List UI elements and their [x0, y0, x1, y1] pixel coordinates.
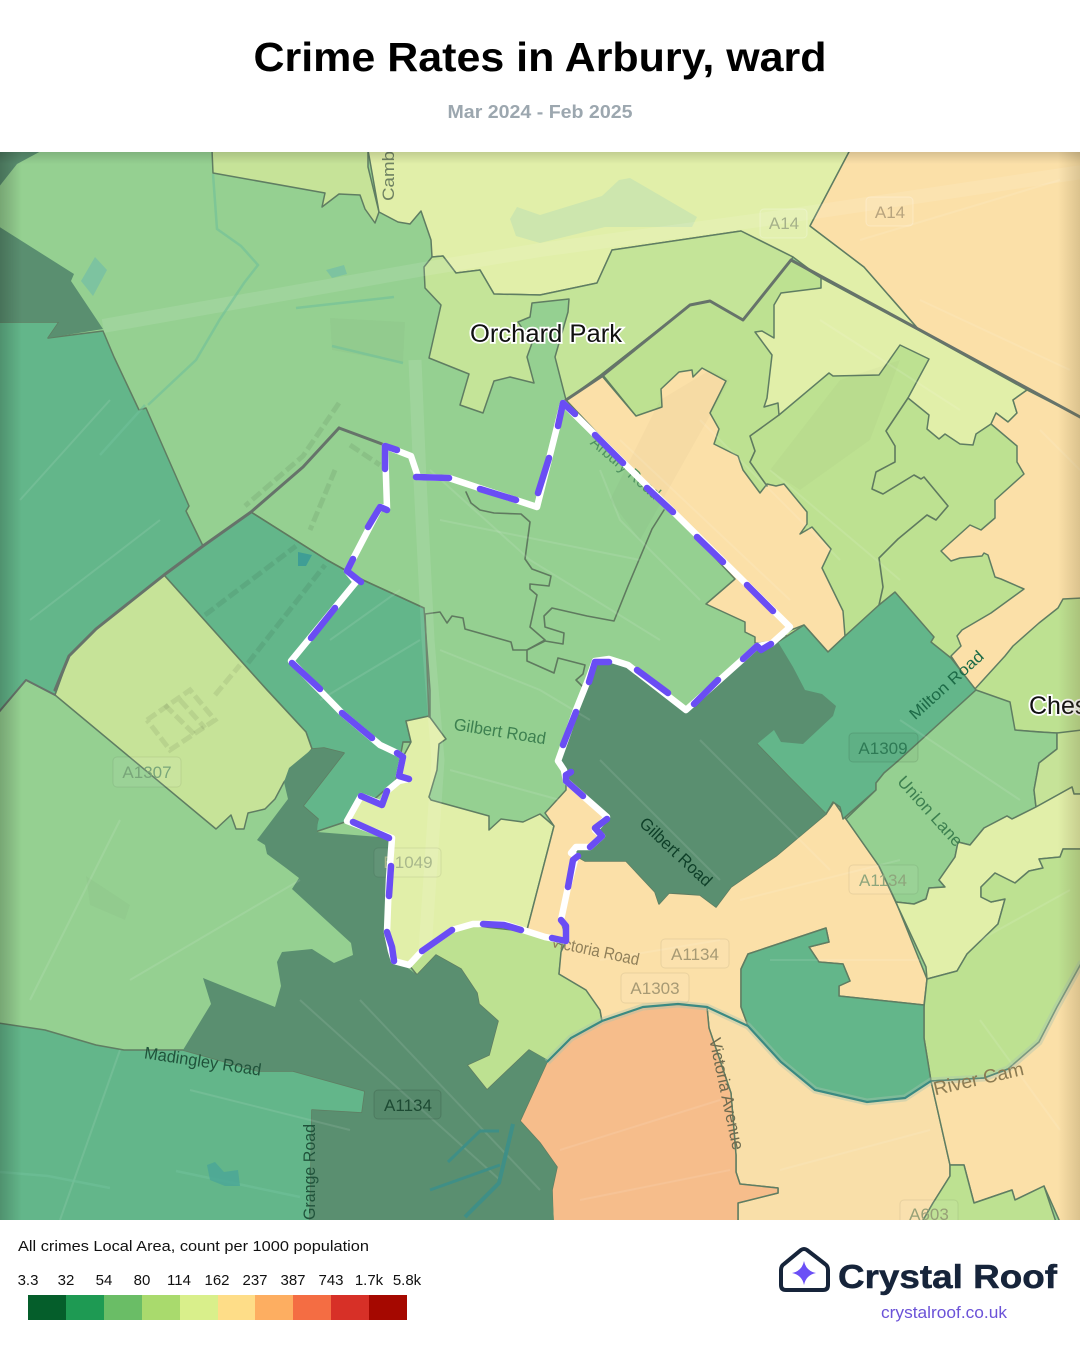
shield: A14 west: A14 [769, 214, 799, 233]
shield: B1049: B1049 [383, 853, 433, 872]
region: lime south of ward [409, 924, 602, 1090]
label: Milton Road: Milton Road [906, 648, 988, 723]
region: cream strip in ward [527, 781, 607, 941]
legend tick labels: 1.7k [355, 1272, 384, 1289]
shield: A14 east [866, 197, 913, 226]
label: Grange Road: Grange Road [300, 1124, 319, 1220]
region: west dark green [0, 226, 103, 338]
region: Orchard Park [424, 231, 793, 413]
label: River Cam: River Cam [932, 1059, 1026, 1100]
purple dashes on boundary [292, 403, 773, 961]
region: yellow east [896, 787, 1080, 979]
brand logo [781, 1249, 1058, 1322]
Arbury ward boundary [291, 403, 790, 965]
legend tick labels: 32 [58, 1272, 74, 1289]
legend tick labels: 5.8k [393, 1272, 422, 1289]
shield: A1134 city: A1134 [384, 1096, 432, 1115]
pond [510, 178, 697, 243]
legend colour scale [28, 1295, 407, 1320]
map edge vignette [0, 152, 1080, 1220]
region: east lime [602, 260, 1080, 735]
legend tick labels: 743 [318, 1272, 344, 1289]
region: cream south-east [931, 962, 1080, 1222]
ladder paths [147, 403, 380, 750]
label: Victoria Avenue: Victoria Avenue [705, 1036, 748, 1152]
shield: A1303 [621, 973, 689, 1003]
boundaries: east estates [872, 398, 948, 605]
place label: Orchard Park: Orchard Park [470, 320, 622, 348]
label: Gilbert Road dark: Gilbert Road [636, 814, 716, 890]
region: cream east of ward [566, 368, 845, 652]
region: green right of dark centre [740, 592, 976, 819]
shield: A1134 east: A1134 [859, 871, 907, 890]
region: cream below Gilbert Road [559, 802, 927, 1026]
region: pale lime Newnham fields [55, 575, 312, 829]
region: north-east yellow estate [755, 278, 1027, 445]
region: Union Lane green [846, 690, 1057, 904]
shield: A1309: A1309 [858, 739, 908, 758]
shield: A1134 south [661, 939, 729, 968]
label: Arbury Road: Arbury Road [587, 432, 664, 503]
shield: A14 west [760, 209, 807, 238]
road shield labels [113, 197, 958, 1230]
shield: B1049 [374, 848, 441, 877]
region: lime bottom [922, 1165, 1056, 1222]
legend [18, 1238, 422, 1320]
region: green west of ward [164, 512, 430, 832]
region: Arbury south yellow [347, 716, 554, 965]
shield: A1307: A1307 [122, 763, 172, 782]
shield: A603: A603 [909, 1205, 949, 1224]
website url: crystalroof.co.uk [881, 1304, 1008, 1322]
shield: A1134 south: A1134 [671, 945, 719, 964]
region: top lime fields [212, 150, 379, 223]
region: city centre dark [183, 748, 557, 1222]
legend tick labels: 387 [280, 1272, 306, 1289]
region: north-east cream [810, 150, 1080, 418]
thick ward boundary lines [0, 260, 1080, 713]
shield: A1309 [849, 733, 918, 762]
shield: A603 [900, 1200, 958, 1230]
region: top yellow north of Orchard Park [368, 150, 920, 331]
icon: house with star [781, 1249, 828, 1290]
region: top-left corner dark [0, 152, 39, 186]
shield: A1134 city [374, 1090, 441, 1119]
legend tick labels: 3.3 [18, 1272, 38, 1289]
legend tick labels: 80 [134, 1272, 150, 1289]
choropleth map [0, 150, 1080, 1230]
legend tick labels: 114 [167, 1272, 191, 1289]
shield: A14 east: A14 [875, 203, 905, 222]
label: Union Lane: Union Lane [894, 772, 967, 850]
title: Crime Rates in Arbury, ward [254, 34, 826, 80]
legend tick labels: 162 [204, 1272, 230, 1289]
region: west green [0, 322, 203, 713]
shield: A1134 east [849, 865, 918, 894]
legend title: All crimes Local Area, count per 1000 population [18, 1238, 369, 1255]
subtitle: date range: Mar 2024 - Feb 2025 [448, 102, 632, 122]
label: Gilbert Road in ward: Gilbert Road [452, 715, 547, 748]
region: dark centre East Chesterton [558, 642, 836, 907]
label: Victoria Road: Victoria Road [549, 932, 641, 969]
label: Cambridge road cut off: Camb [379, 151, 398, 201]
legend tick labels [18, 1272, 422, 1289]
neighbourhood boundaries inside the ward [251, 492, 664, 717]
region: south-west green [0, 1023, 365, 1222]
label: Madingley Road: Madingley Road [143, 1043, 263, 1080]
region: lime south-east [924, 849, 1080, 1081]
legend tick labels: 237 [242, 1272, 268, 1289]
street network [20, 172, 1080, 1220]
legend tick labels: 54 [96, 1272, 112, 1289]
region: green river loop [741, 928, 931, 1102]
region: cream far east [941, 390, 1080, 690]
road name labels [143, 151, 1026, 1220]
region: cream south bank [707, 1007, 950, 1222]
river Cam [547, 962, 1080, 1102]
darker building blocks [86, 318, 900, 920]
region: orange central [520, 1004, 778, 1222]
shield: A1303: A1303 [630, 979, 680, 998]
wordmark: Crystal Roof [838, 1258, 1058, 1295]
shield: A1307 [113, 757, 181, 787]
region: east lime edge [1034, 730, 1080, 807]
water features [0, 174, 513, 1217]
